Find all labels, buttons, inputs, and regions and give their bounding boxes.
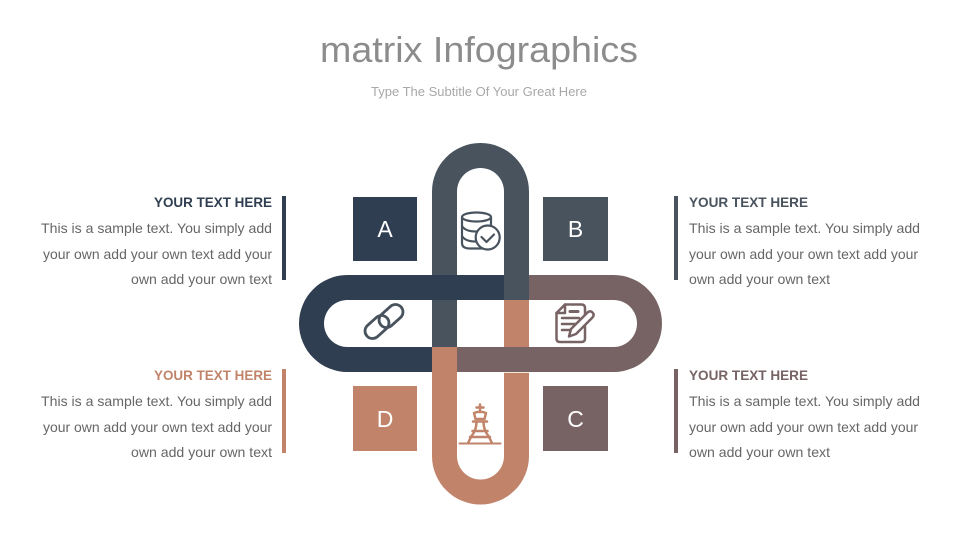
body text D: your own add your own text add your [43,419,272,435]
body text C: your own add your own text add your [689,419,918,435]
weave overlap: slate over bands [504,275,529,300]
icon: document with pencil [556,304,594,342]
heading A: YOUR TEXT HERE [154,194,272,210]
weave gap [504,372,529,373]
interlocking loops [299,143,662,504]
icon: database check [462,212,500,250]
heading D: YOUR TEXT HERE [154,367,272,383]
weave overlap: slate centre [432,300,457,347]
panel: text block A [41,194,286,287]
title: matrix Infographics [320,29,638,70]
body text D [41,393,272,460]
body text D: own add your own text [131,444,272,460]
badge A: A [377,216,393,242]
badge D: D [377,406,393,432]
body text B [689,220,920,287]
body text A: This is a sample text. You simply add [41,220,272,236]
body text A: own add your own text [131,271,272,287]
panel: text block B [674,194,920,287]
body text B: This is a sample text. You simply add [689,220,920,236]
accent bar A [282,196,286,280]
accent bar B [674,196,678,280]
badge D [353,386,417,451]
body text C: own add your own text [689,444,830,460]
badge A [353,197,417,261]
loop: top slate [432,143,529,300]
body text C [689,393,920,460]
badge C [543,386,608,451]
loop: right brown [457,275,662,372]
body text A [41,220,272,287]
badge B: B [568,216,583,242]
body text B: your own add your own text add your [689,246,918,262]
body text D: This is a sample text. You simply add [41,393,272,409]
icon: chain link [362,301,406,342]
badge C: C [567,406,584,432]
icon: chess king [460,404,500,444]
panel: text block D [41,367,286,460]
heading C: YOUR TEXT HERE [689,367,808,383]
weave overlap: terracotta left leg [432,347,457,373]
accent bar D [282,369,286,453]
loop: left navy [299,275,504,372]
loop: bottom terracotta [432,300,529,504]
panel: text block C [674,367,920,460]
heading B: YOUR TEXT HERE [689,194,808,210]
body text A: your own add your own text add your [43,246,272,262]
accent bar C [674,369,678,453]
subtitle: Type The Subtitle Of Your Great Here [371,84,587,99]
body text C: This is a sample text. You simply add [689,393,920,409]
body text B: own add your own text [689,271,830,287]
badge B [543,197,608,261]
